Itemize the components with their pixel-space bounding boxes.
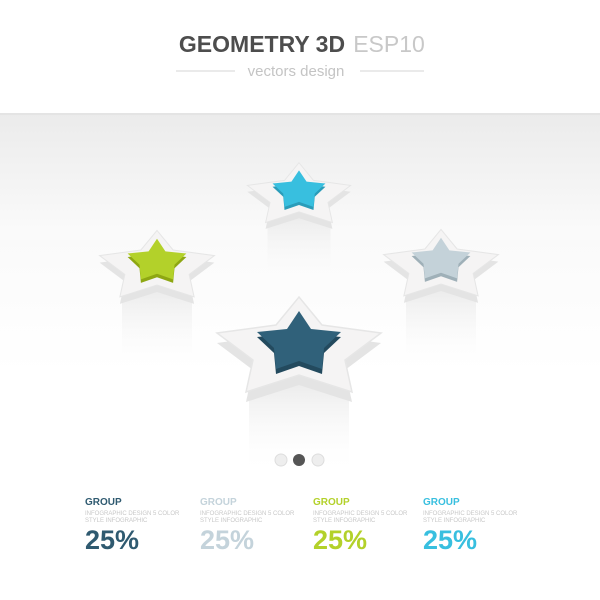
stat: green: STYLE INFOGRAPHIC	[313, 518, 375, 524]
stat: blue: 25%	[423, 525, 477, 555]
stat: grey: GROUP	[200, 497, 237, 508]
stat: green	[313, 497, 407, 555]
stat: grey	[200, 497, 294, 555]
stat: grey: STYLE INFOGRAPHIC	[200, 518, 262, 524]
stat: blue: INFOGRAPHIC DESIGN 5 COLOR	[423, 511, 517, 517]
stat: dark: INFOGRAPHIC DESIGN 5 COLOR	[85, 511, 179, 517]
stat: dark: 25%	[85, 525, 139, 555]
stat: blue	[423, 497, 517, 555]
title: ESP10	[353, 31, 425, 57]
title	[179, 31, 425, 57]
stat: green: GROUP	[313, 497, 350, 508]
stat: blue: STYLE INFOGRAPHIC	[423, 518, 485, 524]
stat: green: INFOGRAPHIC DESIGN 5 COLOR	[313, 511, 407, 517]
stat: grey: INFOGRAPHIC DESIGN 5 COLOR	[200, 511, 294, 517]
stat: dark: GROUP	[85, 497, 122, 508]
pagination dots	[275, 454, 324, 466]
stat: grey: 25%	[200, 525, 254, 555]
star: right grey	[384, 229, 498, 368]
stat: green: 25%	[313, 525, 367, 555]
stat: dark	[85, 497, 179, 555]
stat: blue: GROUP	[423, 497, 460, 508]
star: top blue	[247, 163, 351, 288]
star: big dark blue	[217, 297, 381, 475]
stat: dark: STYLE INFOGRAPHIC	[85, 518, 147, 524]
star: left green	[100, 230, 214, 369]
title: GEOMETRY 3D	[179, 31, 345, 57]
subtitle: vectors design	[248, 63, 344, 80]
